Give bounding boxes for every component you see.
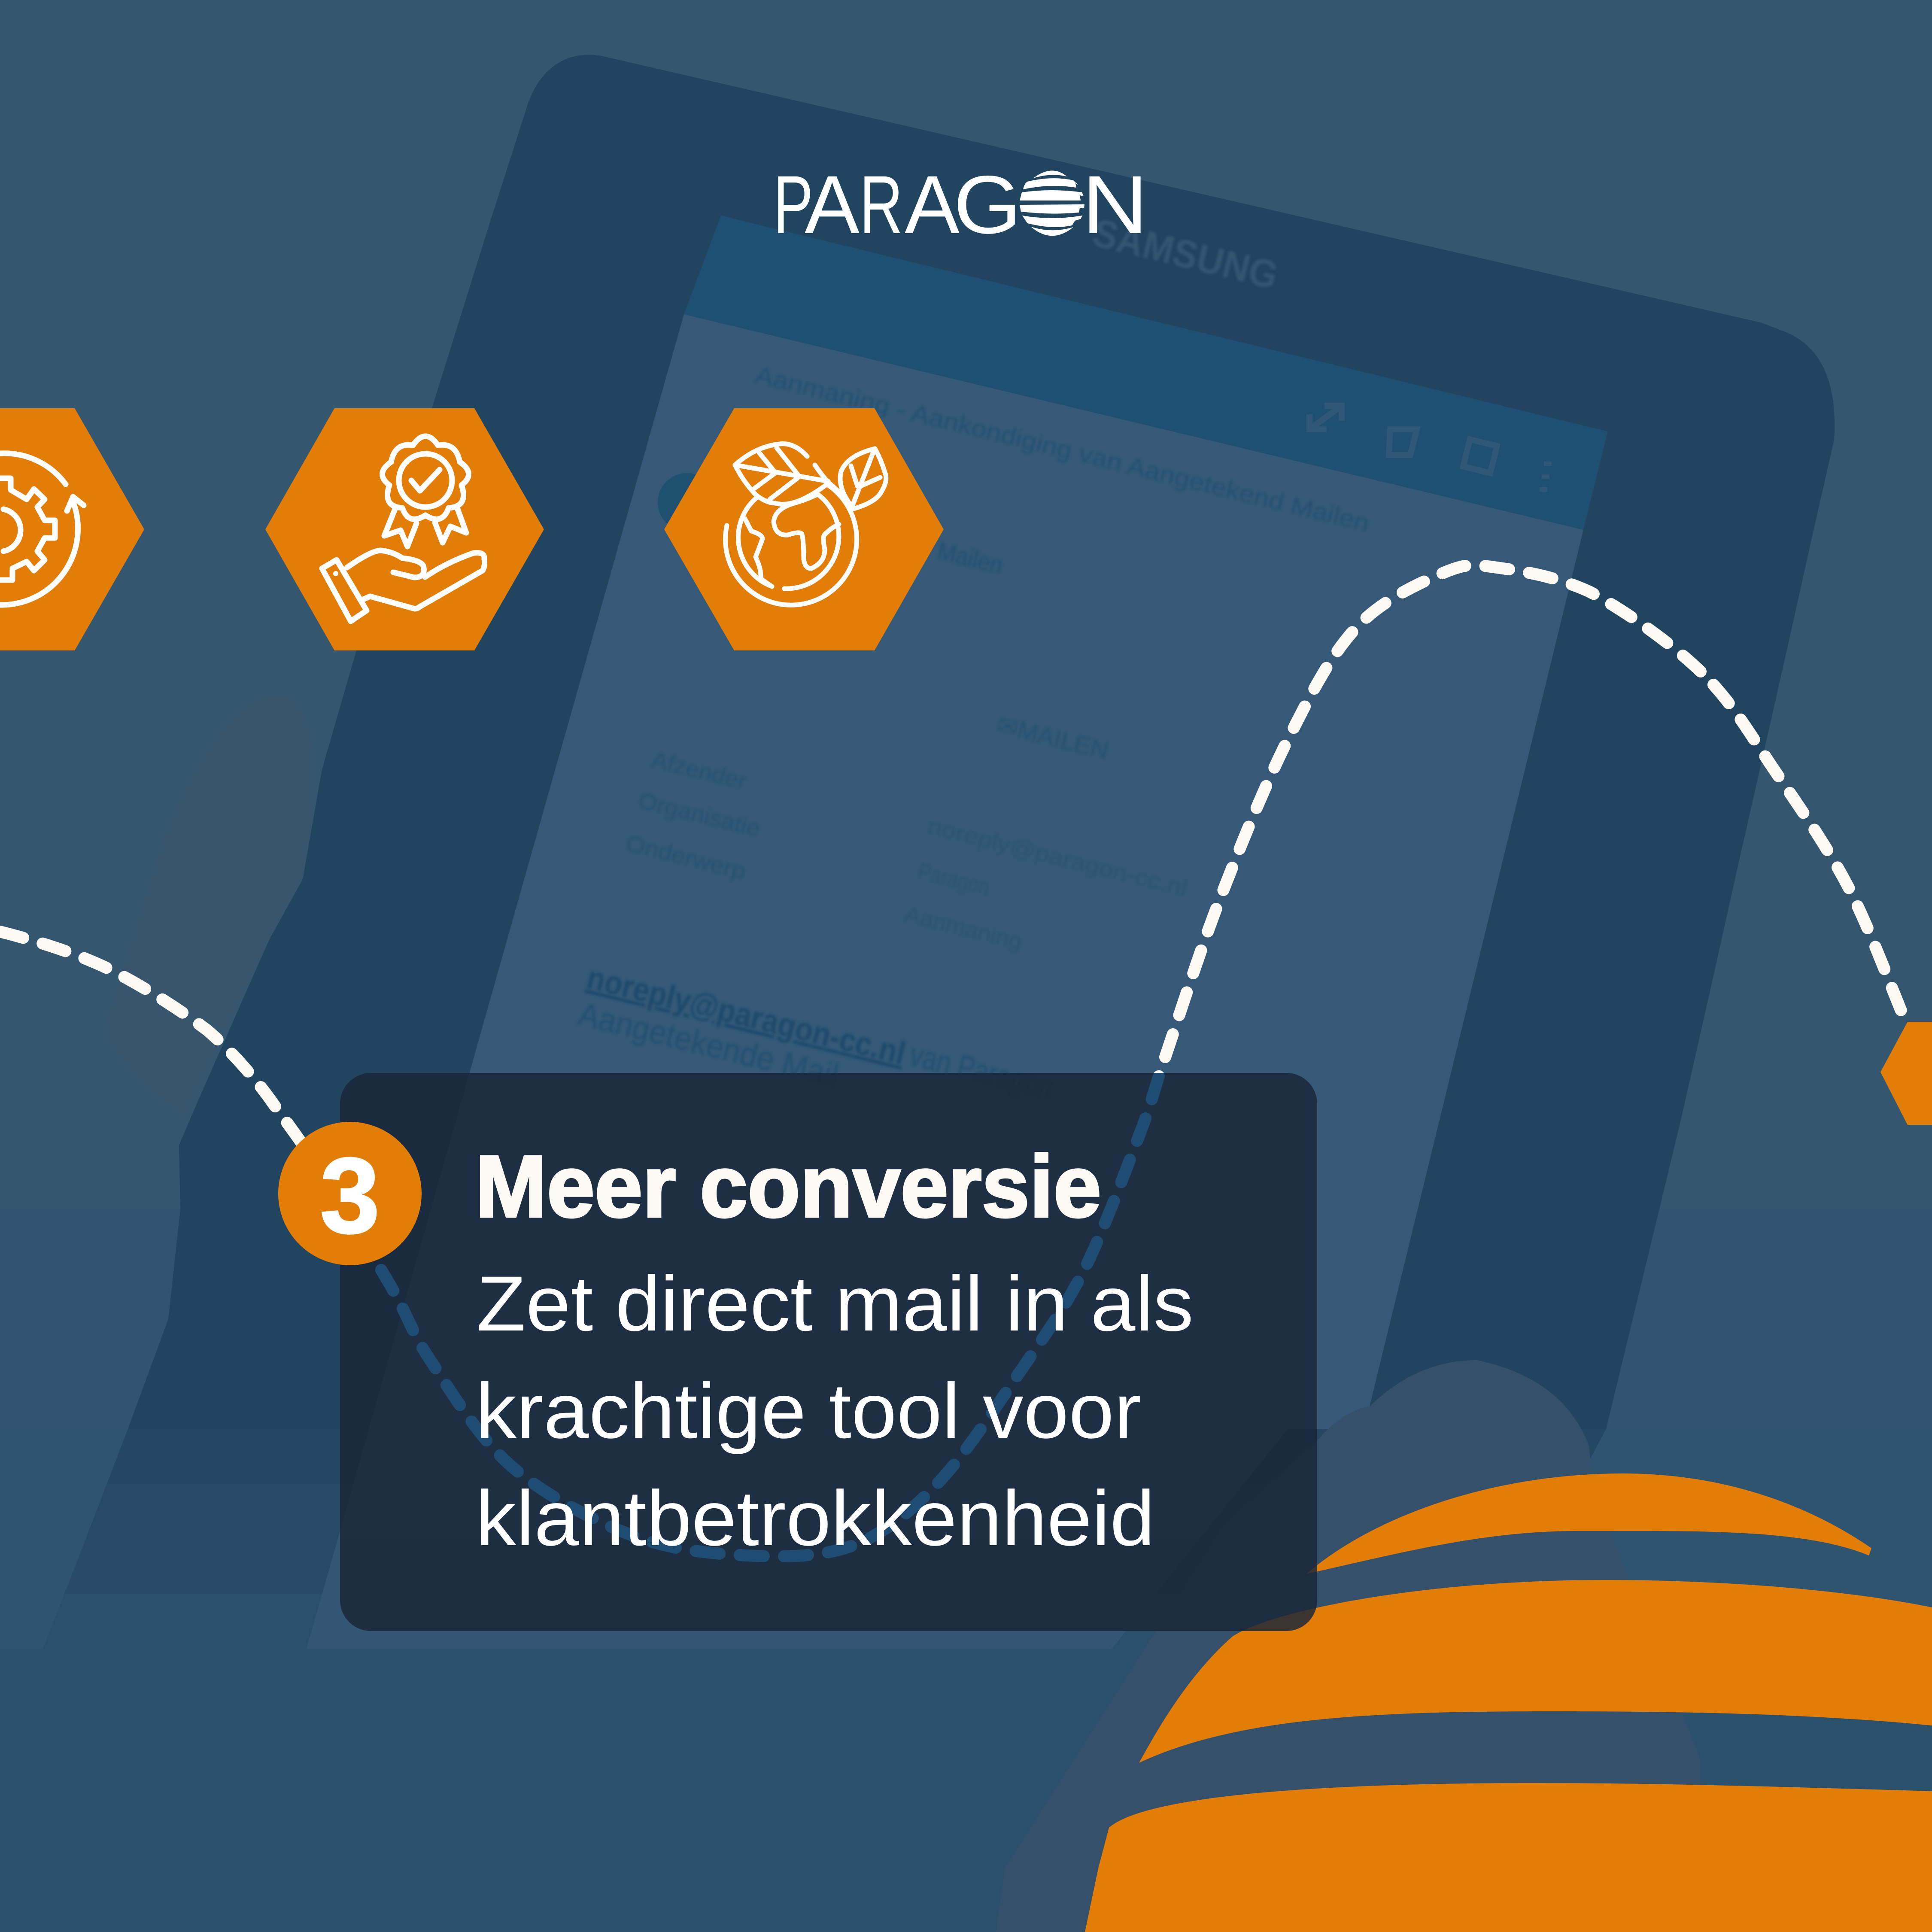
logo wordmark: A (805, 158, 860, 251)
blurred mail content: noreply@paragon-cc.nl (925, 814, 1190, 901)
blurred mail content: ✉MAILEN (994, 711, 1112, 764)
info card (340, 1073, 1317, 1631)
badge number: 3 (320, 1136, 380, 1255)
logo wordmark: A (905, 158, 960, 251)
blurred mail content: van Paragon (906, 1036, 1057, 1106)
hexagon 2: award on hand icon (265, 408, 544, 650)
blurred tablet brand: SAMSUNG (1088, 210, 1282, 298)
left hand thumb (103, 695, 315, 1116)
card body text: krachtige tool voor (476, 1367, 1141, 1455)
icon: gear with arrow (0, 453, 84, 605)
blurred mail content: Onderwerp (623, 831, 748, 884)
icon: rosette and hand (322, 436, 484, 621)
swoosh band 2 (1139, 1580, 1932, 1763)
icon: earth and leaves (726, 444, 886, 605)
card heading: Meer conversie (475, 1137, 1101, 1236)
dashed path (0, 565, 1904, 1556)
card body text: klantbetrokkenheid (476, 1474, 1155, 1562)
blurred mail content: Aanmaning (902, 902, 1025, 954)
screen header bar (684, 216, 1608, 530)
logo wordmark: N (1082, 158, 1148, 251)
hexagon 4: partial right (1880, 1022, 1932, 1125)
tablet screen (307, 314, 1583, 1649)
tablet body (43, 55, 1835, 1649)
orange globe swooshes (1085, 1473, 1932, 1932)
cuff dot (333, 571, 338, 576)
hexagon 3: globe with leaves icon (664, 408, 944, 650)
hexagon 1: gear icon (0, 408, 144, 650)
blurred mail content: Aangetekende Mail (575, 996, 842, 1094)
blurred mail avatar (658, 473, 716, 532)
number badge (278, 1122, 422, 1265)
swoosh band 1 (1306, 1473, 1871, 1574)
blurred mail content (575, 361, 1372, 1106)
blurred mail content: Mailen (935, 537, 1006, 579)
logo wordmark: R (860, 158, 903, 251)
logo wordmark: G (954, 158, 1021, 251)
card body text: Zet direct mail in als (477, 1260, 1194, 1347)
blurred header icons (1309, 406, 1548, 492)
logo globe (1020, 170, 1084, 236)
dashed path inside card (302, 1060, 1164, 1556)
blurred mail content: Paragon (915, 859, 992, 900)
blurred mail content: Afzender (649, 747, 749, 794)
blurred mail content: noreply@paragon-cc.nl (583, 959, 909, 1072)
blurred mail content: Organisatie (636, 788, 763, 841)
right hand fingers (996, 1360, 1700, 1932)
blurred mail content: Aanmaning - Aankondiging van Aangetekend Mailen (753, 361, 1372, 537)
logo wordmark: P (773, 158, 813, 251)
card body text (476, 1260, 1194, 1562)
swoosh band 3 (1085, 1783, 1932, 1932)
logo: PARAGON (773, 158, 1148, 251)
